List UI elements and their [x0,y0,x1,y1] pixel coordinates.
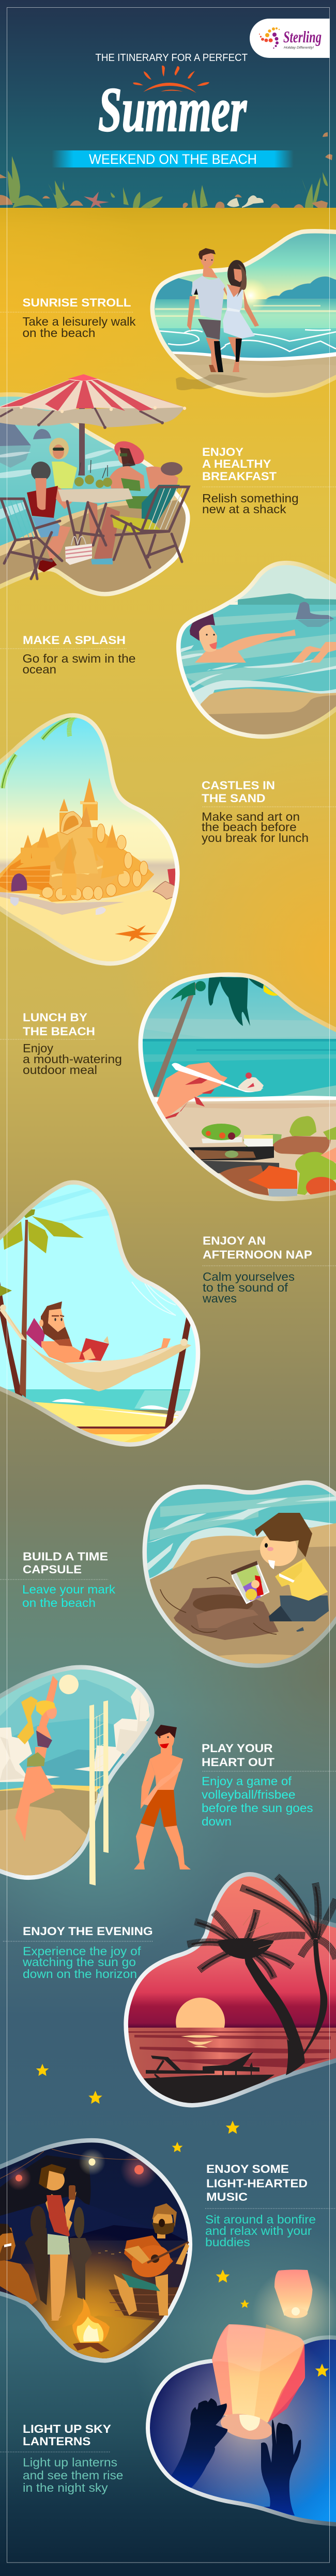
heading [202,779,275,805]
body text: watching the sun go [22,1955,136,1969]
heading: ENJOY THE EVENING [23,1925,153,1938]
body text: Go for a swim in the [23,652,135,665]
people shadow [176,374,248,390]
body text: on the beach [23,326,95,340]
illustration: bonfire [72,2297,110,2353]
illustration: beach volleyball court [0,1667,155,1881]
beach plants and rocks [0,132,332,209]
body text: buddies [205,2235,250,2249]
illustration: sunset sea [124,1871,336,2106]
heading [23,1550,108,1576]
body text: Take a leisurely walk [23,315,136,328]
heading: SUNRISE STROLL [23,296,131,309]
subtitle ribbon: WEEKEND ON THE BEACH [89,151,257,167]
body text: down [202,1815,232,1828]
heading [206,2163,308,2203]
body text: you break for lunch [202,831,309,845]
heading: LUNCH BY [23,1011,87,1024]
illustration frame [181,565,336,734]
body text: down on the horizon [23,1967,137,1981]
body text [202,1774,313,1828]
body text: new at a shack [202,502,286,516]
panel: lunch by the beach [0,974,336,1200]
body text: Experience the joy of [23,1944,141,1958]
heading: HEART OUT [202,1756,275,1769]
illustration: reaching hands [171,2398,301,2516]
body text: waves [202,1292,237,1305]
heading [202,446,277,483]
illustration: umbrella [0,374,186,476]
body text: the beach before [202,820,297,834]
illustration: hammock on beach [0,1181,202,1447]
body text: and relax with your [205,2224,312,2237]
illustration: man sitting left [0,2224,37,2305]
body text: volleyball/frisbee [202,1788,296,1801]
illustration: man playing [134,1725,191,1869]
heading: LANTERNS [23,2435,90,2448]
logo badge: Sterling [283,27,322,46]
illustration frame [0,1669,150,1876]
body text [23,652,135,676]
body text: Leave your mark [22,1583,116,1596]
heading: CAPSULE [23,1563,82,1576]
body text: before the sun goes [202,1801,313,1815]
subtitle ribbon [52,150,294,167]
heading: ENJOY SOME [206,2163,289,2175]
body text: Enjoy a game of [202,1774,292,1788]
heading: LIGHT-HEARTED [206,2177,308,2190]
body text: Sit around a bonfire [205,2213,316,2226]
heading: AFTERNOON NAP [203,1248,312,1261]
heading: LIGHT UP SKY [23,2422,111,2435]
heading: ENJOY AN [203,1234,266,1247]
panel: header [0,19,332,209]
panel: afternoon nap [0,1181,336,1447]
panel: castles in the sand [0,713,336,967]
heading [23,1011,95,1038]
heading: THE BEACH [23,1025,95,1038]
body text: outdoor meal [23,1063,97,1077]
illustration: big lantern [212,2324,305,2444]
heading [202,1742,275,1769]
illustration: volleyball net [89,1700,109,1885]
illustration: meal by the sea [140,974,336,1200]
illustration: walking couple [187,248,259,372]
body text [22,1583,116,1609]
body text [202,492,299,516]
heading: CASTLES IN [202,779,275,792]
heading: MAKE A SPLASH [23,634,126,647]
illustration frame [155,234,336,393]
logo badge [250,19,330,58]
heading: BUILD A TIME [23,1550,108,1563]
small lantern glow [252,2269,336,2357]
panel: light-hearted music [0,2140,336,2362]
illustration: woman spiking [15,1675,79,1842]
illustration: man reading in hammock [0,1301,191,1391]
illustration frame [128,1876,336,2103]
body text [23,2456,123,2494]
panel: enjoy the evening [3,1871,336,2106]
illustration: background dancers [25,2206,92,2305]
illustration frame [0,396,186,592]
illustration: beach scene [0,396,186,592]
illustration: swimmer in ocean [181,565,336,734]
illustration: sun loungers [146,2052,259,2079]
body text: Make sand art on [202,810,300,823]
body text: ocean [23,663,56,676]
body text [202,1270,295,1305]
body text: Relish something [202,492,299,505]
panel: sky lanterns [0,2269,336,2527]
illustration frame [0,717,175,961]
icon: sun rays [133,66,209,93]
body text [23,1041,122,1077]
title line: THE ITINERARY FOR A PERFECT [95,52,248,64]
icon: star [315,2364,329,2376]
script word summer: Summer [98,75,247,145]
illustration frame [147,1485,336,1663]
body text: Calm yourselves [203,1270,295,1283]
heading [203,1234,312,1261]
icons: stars [36,2064,249,2308]
body text: a mouth-watering [23,1052,122,1066]
heading [23,2422,111,2448]
body text: Enjoy [23,1041,53,1055]
heading: A HEALTHY [202,457,271,470]
heading: THE SAND [202,792,266,805]
panel: healthy breakfast [0,374,336,600]
logo badge: Holiday Differently! [284,46,314,50]
illustration: night sky [145,2336,336,2527]
illustration: man with guitar [114,2203,189,2316]
body text: Light up lanterns [23,2456,117,2469]
body text: in the night sky [23,2481,108,2494]
panel: make a splash [0,561,336,744]
heading: ENJOY [202,446,243,458]
illustration frame [143,977,336,1197]
illustration: digging at the shore [142,1481,336,1669]
panel: sunrise stroll [0,230,336,404]
body text [202,810,309,845]
illustration frame [0,1185,196,1442]
panel: time capsule [0,1481,336,1669]
illustration: friends at table [1,437,189,579]
illustration: palm trees [187,1876,336,2075]
illustration: sand castle [0,713,181,967]
illustration: child with jar [231,1513,329,1632]
panel: play your heart out [0,1667,336,1885]
illustration: girl with drink [39,2164,77,2321]
illustration: bonfire party [0,2140,194,2362]
body text: on the beach [22,1596,96,1609]
body text [23,315,136,340]
heading: BREAKFAST [202,470,277,483]
body text [205,2213,316,2249]
heading: PLAY YOUR [202,1742,273,1755]
illustration: beach at sunrise [155,234,336,393]
illustration frame [150,2339,336,2522]
illustration frame [0,2142,188,2358]
heading: MUSIC [206,2190,248,2203]
body text: to the sound of [203,1281,288,1294]
icon: small lantern [274,2270,312,2318]
body text: and see them rise [23,2468,123,2482]
body text [22,1944,141,1981]
